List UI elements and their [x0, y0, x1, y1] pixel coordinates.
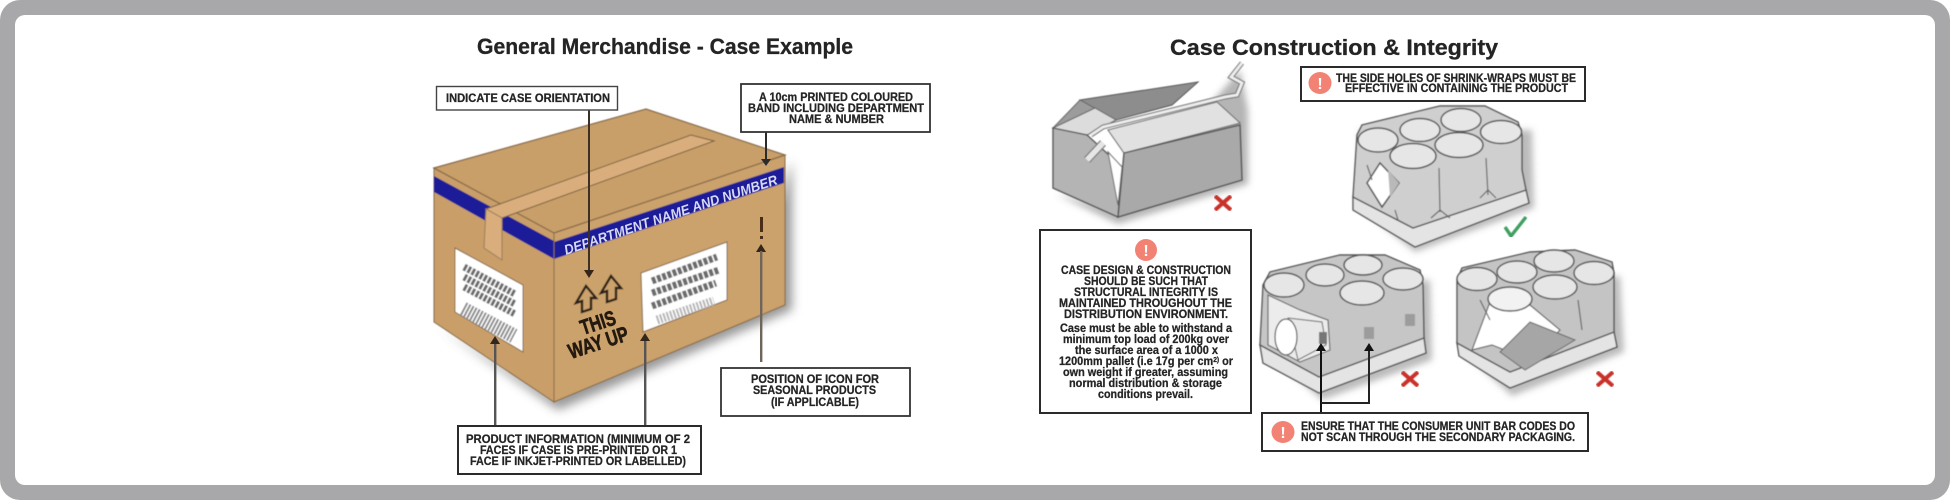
callout: case design and construction: CASE DESIGN & CONSTRUCTION [1061, 265, 1231, 277]
tape [486, 135, 714, 218]
callout: consumer unit bar codes: NOT SCAN THROUGH THE SECONDARY PACKAGING. [1301, 432, 1575, 444]
arrow: case orientation [584, 110, 594, 278]
icon: red cross [1402, 372, 1418, 386]
callout: case design and construction: DISTRIBUTION ENVIRONMENT. [1064, 309, 1228, 321]
callout: case design and construction: or [1219, 356, 1233, 368]
callout: side holes of shrink-wraps: ! [1317, 76, 1323, 93]
callout: indicate case orientation [436, 86, 618, 110]
right label [641, 242, 727, 332]
callout: seasonal icon position [721, 368, 910, 416]
callout: product information [458, 426, 701, 474]
icon: green check [1505, 217, 1526, 236]
callout: product information: PRODUCT INFORMATION (MINIMUM OF 2 [466, 434, 690, 446]
callout: printed coloured band: NAME & NUMBER [789, 114, 885, 126]
callout: indicate case orientation: INDICATE CASE ORIENTATION [446, 93, 610, 105]
callout: seasonal icon position: (IF APPLICABLE) [771, 397, 859, 409]
callout: case design and construction: Case must be able to withstand a [1060, 323, 1233, 335]
callout: product information: FACES IF CASE IS PRE-PRINTED OR 1 [480, 445, 678, 457]
text: department name and number: DEPARTMENT NAME AND NUMBER [562, 171, 780, 258]
arrow: coloured band [761, 132, 771, 166]
panel: case construction and integrity [1040, 35, 1624, 451]
callout: printed coloured band: BAND INCLUDING DEPARTMENT [748, 103, 924, 115]
text: this way up: WAY UP [565, 323, 632, 364]
panel: general merchandise case example [434, 34, 930, 474]
illustration: torn pack with visible bar codes [1260, 255, 1432, 400]
text: this way up: THIS [577, 307, 619, 340]
arrow: right label [640, 333, 650, 426]
icon: red cross [1215, 196, 1231, 210]
callout: case design and construction: normal distribution & storage [1069, 378, 1222, 390]
callout: case design and construction: 2) [1213, 357, 1219, 364]
arrows: bar code pointers [1316, 343, 1374, 413]
callout: seasonal icon position: POSITION OF ICON FOR [751, 374, 880, 386]
illustration: correct shrink-wrapped pack [1353, 106, 1534, 252]
left label [455, 248, 523, 352]
callout: side holes of shrink-wraps: EFFECTIVE IN CONTAINING THE PRODUCT [1345, 83, 1568, 95]
callout: case design and construction [1040, 230, 1251, 413]
callout: case design and construction: own weight if greater, assuming [1063, 367, 1228, 379]
callout: consumer unit bar codes [1262, 413, 1588, 451]
callout: case design and construction: ! [1143, 243, 1149, 260]
illustration: cardboard case [434, 109, 792, 410]
callout: product information: FACE IF INKJET-PRINTED OR LABELLED) [470, 456, 686, 468]
callout: case design and construction: STRUCTURAL INTEGRITY IS [1074, 287, 1218, 299]
callout: case design and construction: SHOULD BE SUCH THAT [1084, 276, 1208, 288]
heading: general merchandise: General Merchandise - Case Example [477, 34, 853, 59]
callout: consumer unit bar codes: ENSURE THAT THE CONSUMER UNIT BAR CODES DO [1301, 421, 1575, 433]
callout: case design and construction: 1200mm pallet (i.e 17g per cm [1059, 356, 1222, 368]
callout: printed coloured band [741, 84, 930, 132]
callout: consumer unit bar codes: ! [1280, 425, 1286, 442]
heading: case construction: Case Construction & Integrity [1170, 35, 1499, 60]
callout: seasonal icon position: SEASONAL PRODUCTS [753, 385, 876, 397]
callout: case design and construction: MAINTAINED THROUGHOUT THE [1059, 298, 1232, 310]
callout: case design and construction: the surface area of a 1000 x [1075, 345, 1219, 357]
callout: side holes of shrink-wraps [1301, 67, 1585, 101]
callout: side holes of shrink-wraps: THE SIDE HOLES OF SHRINK-WRAPS MUST BE [1336, 73, 1576, 85]
icon: red cross [1597, 372, 1613, 386]
text: this way up [565, 307, 632, 364]
callout: printed coloured band: A 10cm PRINTED COLOURED [759, 92, 913, 104]
illustration: damaged open case [1053, 63, 1248, 224]
callout: case design and construction: minimum top load of 200kg over [1063, 334, 1229, 346]
this way up arrows [576, 276, 621, 312]
arrow: seasonal icon [756, 217, 766, 362]
callout: case design and construction: conditions prevail. [1098, 389, 1193, 401]
illustration: pack with collapsed can [1457, 250, 1624, 396]
arrow: left label [490, 336, 500, 426]
